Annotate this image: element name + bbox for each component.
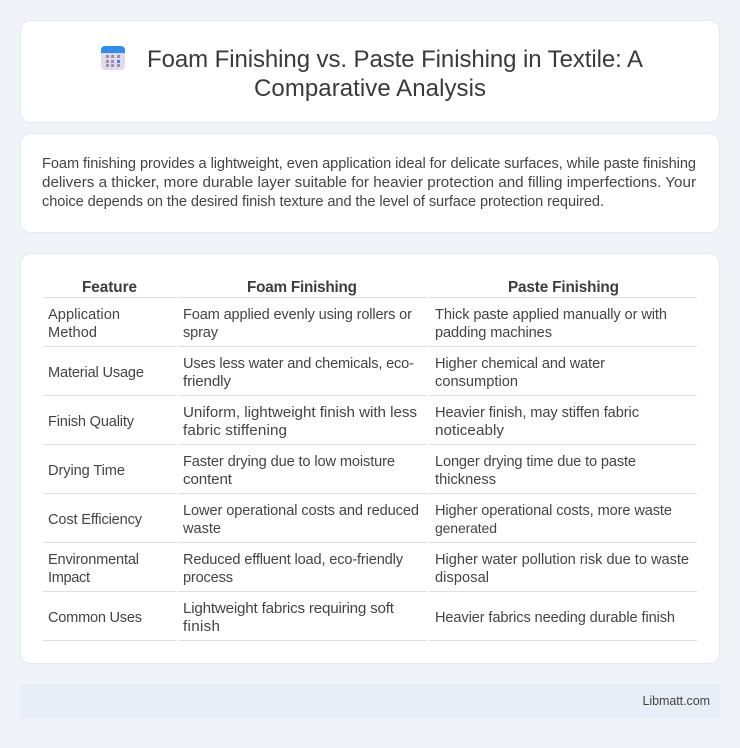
- row: finish quality: Uniform, lightweight finish with less: [183, 404, 417, 421]
- table header row: Paste Finishing: [508, 279, 619, 296]
- panel: header card: [20, 20, 720, 122]
- row: cost efficiency: generated: [435, 520, 497, 536]
- row: common uses: [48, 600, 675, 635]
- row: finish quality: Finish Quality: [48, 414, 135, 430]
- title: [147, 46, 643, 102]
- row: application method: Thick paste applied manually or with: [435, 307, 667, 323]
- table header row: [82, 279, 619, 296]
- row: common uses: Common Uses: [48, 610, 142, 626]
- row: material usage: Material Usage: [48, 365, 144, 381]
- row: drying time: thickness: [435, 472, 496, 488]
- footer bar: [20, 684, 720, 718]
- row: drying time: Drying Time: [48, 463, 125, 479]
- row: material usage: Uses less water and chemicals, eco-: [183, 356, 414, 372]
- row: drying time: Longer drying time due to paste: [435, 454, 636, 470]
- intro text: delivers a thicker, more durable layer suitable for heavier protection and filling imperfections. Your: [42, 174, 696, 191]
- row: application method: spray: [183, 325, 219, 341]
- row: environmental impact: process: [183, 570, 233, 586]
- row: common uses: Heavier fabrics needing durable finish: [435, 610, 675, 626]
- row: application method: Method: [48, 325, 97, 341]
- row: environmental impact: Reduced effluent load, eco-friendly: [183, 552, 404, 568]
- row: drying time: content: [183, 471, 233, 488]
- row: application method: Application: [48, 307, 120, 323]
- row: environmental impact: disposal: [435, 570, 489, 586]
- title: Comparative Analysis: [254, 75, 486, 102]
- row: cost efficiency: waste: [182, 521, 221, 537]
- row: application method: Foam applied evenly using rollers or: [183, 307, 412, 323]
- row: application method: [48, 307, 667, 341]
- row: environmental impact: Environmental: [48, 552, 139, 568]
- row: material usage: [48, 356, 605, 390]
- row: cost efficiency: Cost Efficiency: [48, 512, 143, 528]
- row: finish quality: Heavier finish, may stiffen fabric: [435, 405, 639, 421]
- row: cost efficiency: Lower operational costs and reduced: [183, 503, 419, 519]
- row: material usage: friendly: [183, 373, 231, 390]
- row: environmental impact: [48, 552, 689, 586]
- row: common uses: Lightweight fabrics requiring soft: [183, 600, 395, 617]
- row: environmental impact: Higher water pollution risk due to waste: [435, 552, 689, 568]
- table header row: Feature: [82, 279, 137, 296]
- footer credit: Libmatt.com: [642, 694, 710, 708]
- row: finish quality: [48, 404, 639, 439]
- icon: calendar: [101, 46, 125, 70]
- row: drying time: Faster drying due to low moisture: [183, 454, 395, 470]
- intro text: Foam finishing provides a lightweight, even application ideal for delicate surfaces, while paste finishing: [42, 156, 696, 172]
- row: environmental impact: Impact: [48, 570, 90, 586]
- panel: intro card: [20, 134, 720, 232]
- panel: comparison table: [20, 254, 720, 664]
- row: application method: padding machines: [435, 325, 552, 341]
- row: finish quality: noticeably: [435, 422, 504, 439]
- row: cost efficiency: Higher operational costs, more waste: [435, 503, 672, 519]
- row: drying time: [48, 454, 636, 488]
- intro text: [42, 156, 696, 210]
- title: Foam Finishing vs. Paste Finishing in Textile: A: [147, 46, 643, 73]
- row: finish quality: fabric stiffening: [183, 422, 287, 439]
- intro text: choice depends on the desired finish texture and the level of surface protection required.: [42, 194, 604, 210]
- row: cost efficiency: [48, 503, 672, 537]
- row: material usage: Higher chemical and water: [435, 356, 605, 372]
- row: common uses: finish: [183, 618, 220, 635]
- row: material usage: consumption: [435, 374, 518, 390]
- table header row: Foam Finishing: [247, 279, 357, 296]
